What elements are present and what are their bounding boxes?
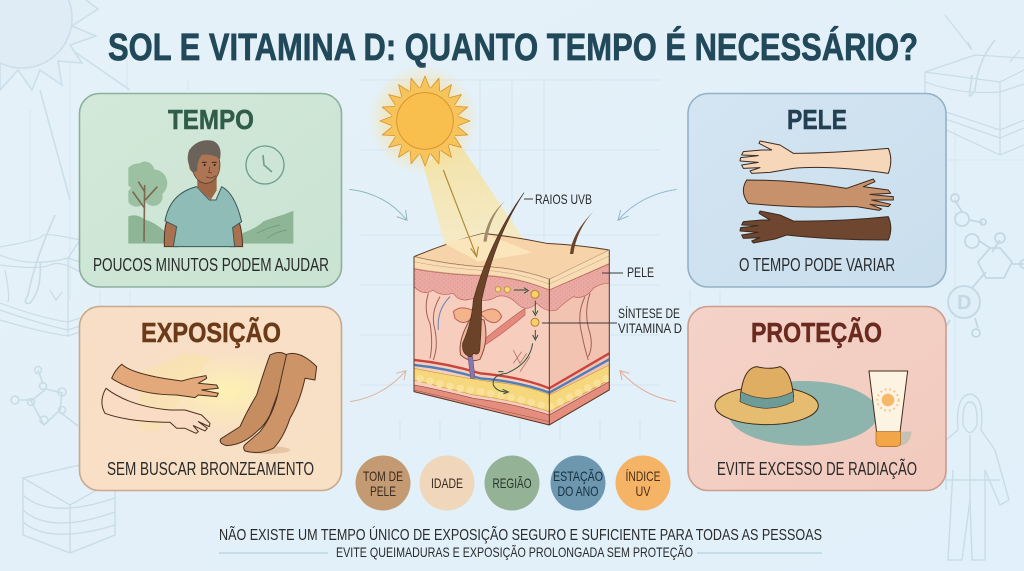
clock (246, 146, 284, 184)
background: faint skin block left (0, 215, 80, 336)
right face (549, 250, 609, 425)
clock hands (263, 155, 272, 172)
panel: pele (688, 94, 946, 287)
background: faint sun (0, 0, 130, 200)
sebaceous gland and muscle (453, 300, 502, 323)
pele caption: O TEMPO PODE VARIAR (739, 255, 895, 275)
panel: proteção (688, 306, 946, 490)
icon: person outdoors with clock (125, 140, 293, 247)
bottom warning: EVITE QUEIMADURAS E EXPOSIÇÃO PROLONGADA SEM PROTEÇÃO (336, 544, 693, 560)
background: faint vitamin D molecule (940, 194, 1024, 337)
proteção caption: EVITE EXCESSO DE RADIAÇÃO (717, 458, 917, 479)
icon: three arms of different skin tones (740, 141, 893, 243)
top face (414, 233, 609, 279)
panel: tempo (80, 94, 342, 287)
bottom statement: NÃO EXISTE UM TEMPO ÚNICO DE EXPOSIÇÃO SEGURO E SUFICIENTE PARA TODAS AS PESSOAS (219, 524, 822, 544)
factor: índice uv (616, 456, 670, 510)
central skin diagram (349, 65, 677, 425)
label: síntese de vitamina D: SÍNTESE DE (618, 305, 680, 321)
background: faint layered block lower left (23, 465, 115, 553)
pink dermis band (414, 264, 609, 311)
factor: estação do ano: ESTAÇÃO (553, 468, 603, 484)
pele heading: PELE (787, 104, 847, 135)
label: pele: PELE (627, 264, 654, 280)
label: raios uvb (524, 191, 592, 207)
proteção heading: PROTEÇÃO (751, 317, 882, 348)
factor: tom de pele (356, 456, 410, 510)
icon: arms and legs in the sun (102, 352, 317, 454)
exposição caption: SEM BUSCAR BRONZEAMENTO (107, 459, 314, 479)
background: faint D letter: D (957, 292, 971, 314)
vitamin D molecules and pathway (493, 287, 539, 394)
background: faint skin block right (925, 15, 1024, 155)
background: faint molecule left (11, 366, 78, 426)
background: faint protective suit (946, 394, 1009, 560)
lit patch on skin (444, 233, 533, 262)
label: raios uvb: RAIOS UVB (535, 191, 592, 207)
light beam (423, 142, 533, 262)
label: síntese de vitamina D (542, 305, 682, 336)
left face (414, 257, 549, 425)
factor: região (484, 456, 540, 510)
factor: tom de pele: PELE (370, 483, 396, 499)
uvb arrow (443, 170, 478, 257)
skin block (414, 233, 609, 425)
label: síntese de vitamina D: VITAMINA D (618, 320, 682, 336)
exposição heading: EXPOSIÇÃO (141, 317, 281, 348)
panel: exposição (80, 306, 342, 490)
label: pele (602, 264, 654, 280)
icon: hat and sunscreen (715, 367, 912, 447)
icon: sun (368, 65, 478, 175)
hair shafts (463, 193, 593, 357)
factor: índice uv: ÍNDICE (626, 468, 660, 484)
factor: região: REGIÃO (492, 475, 532, 491)
vessels (414, 353, 609, 388)
epidermis band (414, 250, 609, 290)
factor: estação do ano: DO ANO (558, 483, 599, 499)
factor: idade: IDADE (431, 475, 463, 491)
arrow: tempo to skin (349, 189, 407, 220)
arrow: pele to skin (618, 189, 677, 220)
factor: estação do ano (550, 456, 606, 510)
arrow: exposição to skin (350, 371, 406, 402)
factor: idade (420, 456, 474, 510)
tempo caption: POUCOS MINUTOS PODEM AJUDAR (93, 255, 329, 275)
factor: índice uv: UV (636, 483, 651, 499)
fat and lower layers (414, 365, 609, 412)
outline (414, 250, 609, 425)
arrow: proteção to skin (620, 371, 676, 402)
hair follicle (460, 317, 486, 378)
tempo heading: TEMPO (168, 104, 254, 135)
factor: tom de pele: TOM DE (363, 468, 403, 484)
